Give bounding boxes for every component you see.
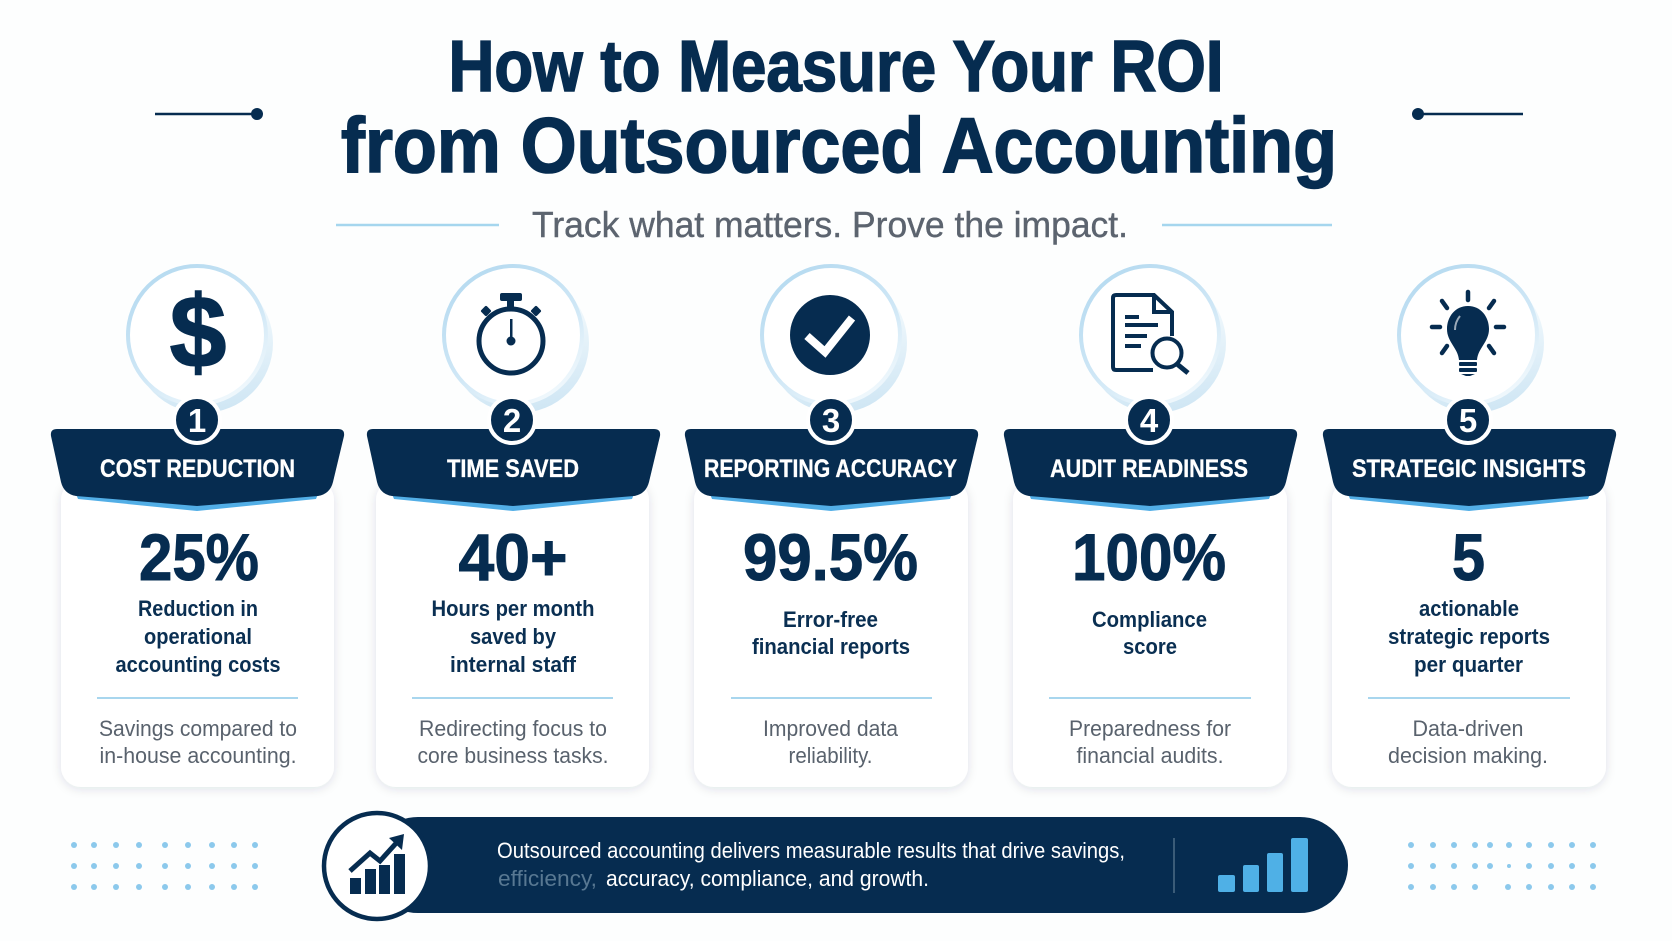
number badge: 5	[1459, 402, 1477, 439]
header banner	[685, 429, 978, 511]
subtitle: Track what matters. Prove the impact.	[532, 204, 1128, 245]
summary text	[497, 838, 1125, 891]
number badge	[174, 397, 220, 443]
icon: check in ring	[762, 266, 907, 413]
metric description: Reduction in	[138, 596, 258, 621]
metric description: actionable	[1419, 596, 1519, 621]
decorative dots left	[71, 842, 258, 890]
card background	[376, 480, 649, 787]
note: reliability.	[788, 743, 872, 768]
metric description: accounting costs	[116, 652, 280, 677]
card background	[694, 480, 968, 787]
number badge: 2	[503, 402, 521, 439]
header banner	[1323, 429, 1616, 511]
callout: bottom summary bar	[324, 813, 1348, 919]
metric description	[752, 607, 910, 659]
metric description	[116, 596, 280, 677]
note: decision making.	[1388, 743, 1548, 768]
header banner: COST REDUCTION	[100, 455, 295, 483]
note	[1069, 716, 1231, 768]
panel: time saved	[367, 266, 660, 787]
metric description: Compliance	[1092, 607, 1207, 632]
metric description: strategic reports	[1388, 624, 1550, 649]
left title accent	[155, 108, 263, 120]
note	[763, 716, 899, 768]
icon: stopwatch in ring	[444, 266, 589, 413]
icon: growth chart in circle	[324, 813, 430, 919]
icon: dollar in ring	[128, 266, 273, 413]
title	[341, 27, 1337, 189]
note: Redirecting focus to	[419, 716, 607, 741]
number badge	[489, 397, 535, 443]
note: Savings compared to	[99, 716, 297, 741]
note: Data-driven	[1412, 716, 1524, 741]
metric description: Hours per month	[432, 596, 594, 621]
note: Preparedness for	[1069, 716, 1231, 741]
title: from Outsourced Accounting	[341, 101, 1337, 189]
note	[418, 716, 608, 768]
metric: 40+	[458, 520, 568, 594]
icon: light bulb in ring	[1399, 266, 1544, 413]
number badge	[1445, 397, 1491, 443]
header banner	[367, 429, 660, 511]
number badge: 1	[188, 402, 206, 439]
header banner: AUDIT READINESS	[1050, 455, 1248, 483]
header banner: REPORTING ACCURACY	[704, 455, 957, 483]
right title accent	[1412, 108, 1523, 120]
number badge	[1126, 397, 1172, 443]
metric description: operational	[144, 624, 252, 649]
summary text: Outsourced accounting delivers measurable results that drive savings,	[497, 838, 1125, 863]
panel: strategic insights	[1323, 266, 1616, 787]
card background	[61, 480, 334, 787]
icon: rising bars	[1218, 838, 1308, 892]
metric description: per quarter	[1414, 652, 1523, 677]
metric description: Error-free	[783, 607, 878, 632]
title: How to Measure Your ROI	[448, 27, 1224, 107]
icon: dollar in ring: $	[170, 275, 226, 389]
metric description	[1092, 607, 1207, 659]
metric description	[1388, 596, 1550, 677]
note: in-house accounting.	[100, 743, 296, 768]
metric description: score	[1123, 634, 1177, 659]
summary text: accuracy, compliance, and growth.	[606, 866, 929, 891]
number badge	[808, 397, 854, 443]
number badge: 3	[822, 402, 840, 439]
metric description	[432, 596, 594, 677]
icon: document search in ring	[1081, 266, 1226, 413]
note: financial audits.	[1076, 743, 1224, 768]
note: core business tasks.	[418, 743, 608, 768]
decorative dots right	[1408, 842, 1596, 890]
metric description: financial reports	[752, 634, 910, 659]
note	[99, 716, 297, 768]
note	[1388, 716, 1548, 768]
metric description: internal staff	[450, 652, 577, 677]
summary text: efficiency,	[498, 866, 597, 891]
card background	[1332, 480, 1606, 787]
header banner: STRATEGIC INSIGHTS	[1352, 455, 1586, 483]
header banner: TIME SAVED	[447, 455, 579, 483]
header banner	[1004, 429, 1297, 511]
panel: audit readiness	[1004, 266, 1297, 787]
metric: 99.5%	[743, 520, 918, 594]
header banner	[51, 429, 344, 511]
card background	[1013, 480, 1287, 787]
number badge: 4	[1140, 402, 1159, 439]
metric description: saved by	[470, 624, 557, 649]
panel: cost reduction	[51, 266, 344, 787]
metric: 5	[1452, 520, 1485, 594]
metric: 25%	[139, 520, 259, 594]
metric: 100%	[1072, 520, 1226, 594]
panel: reporting accuracy	[685, 266, 978, 787]
note: Improved data	[763, 716, 899, 741]
